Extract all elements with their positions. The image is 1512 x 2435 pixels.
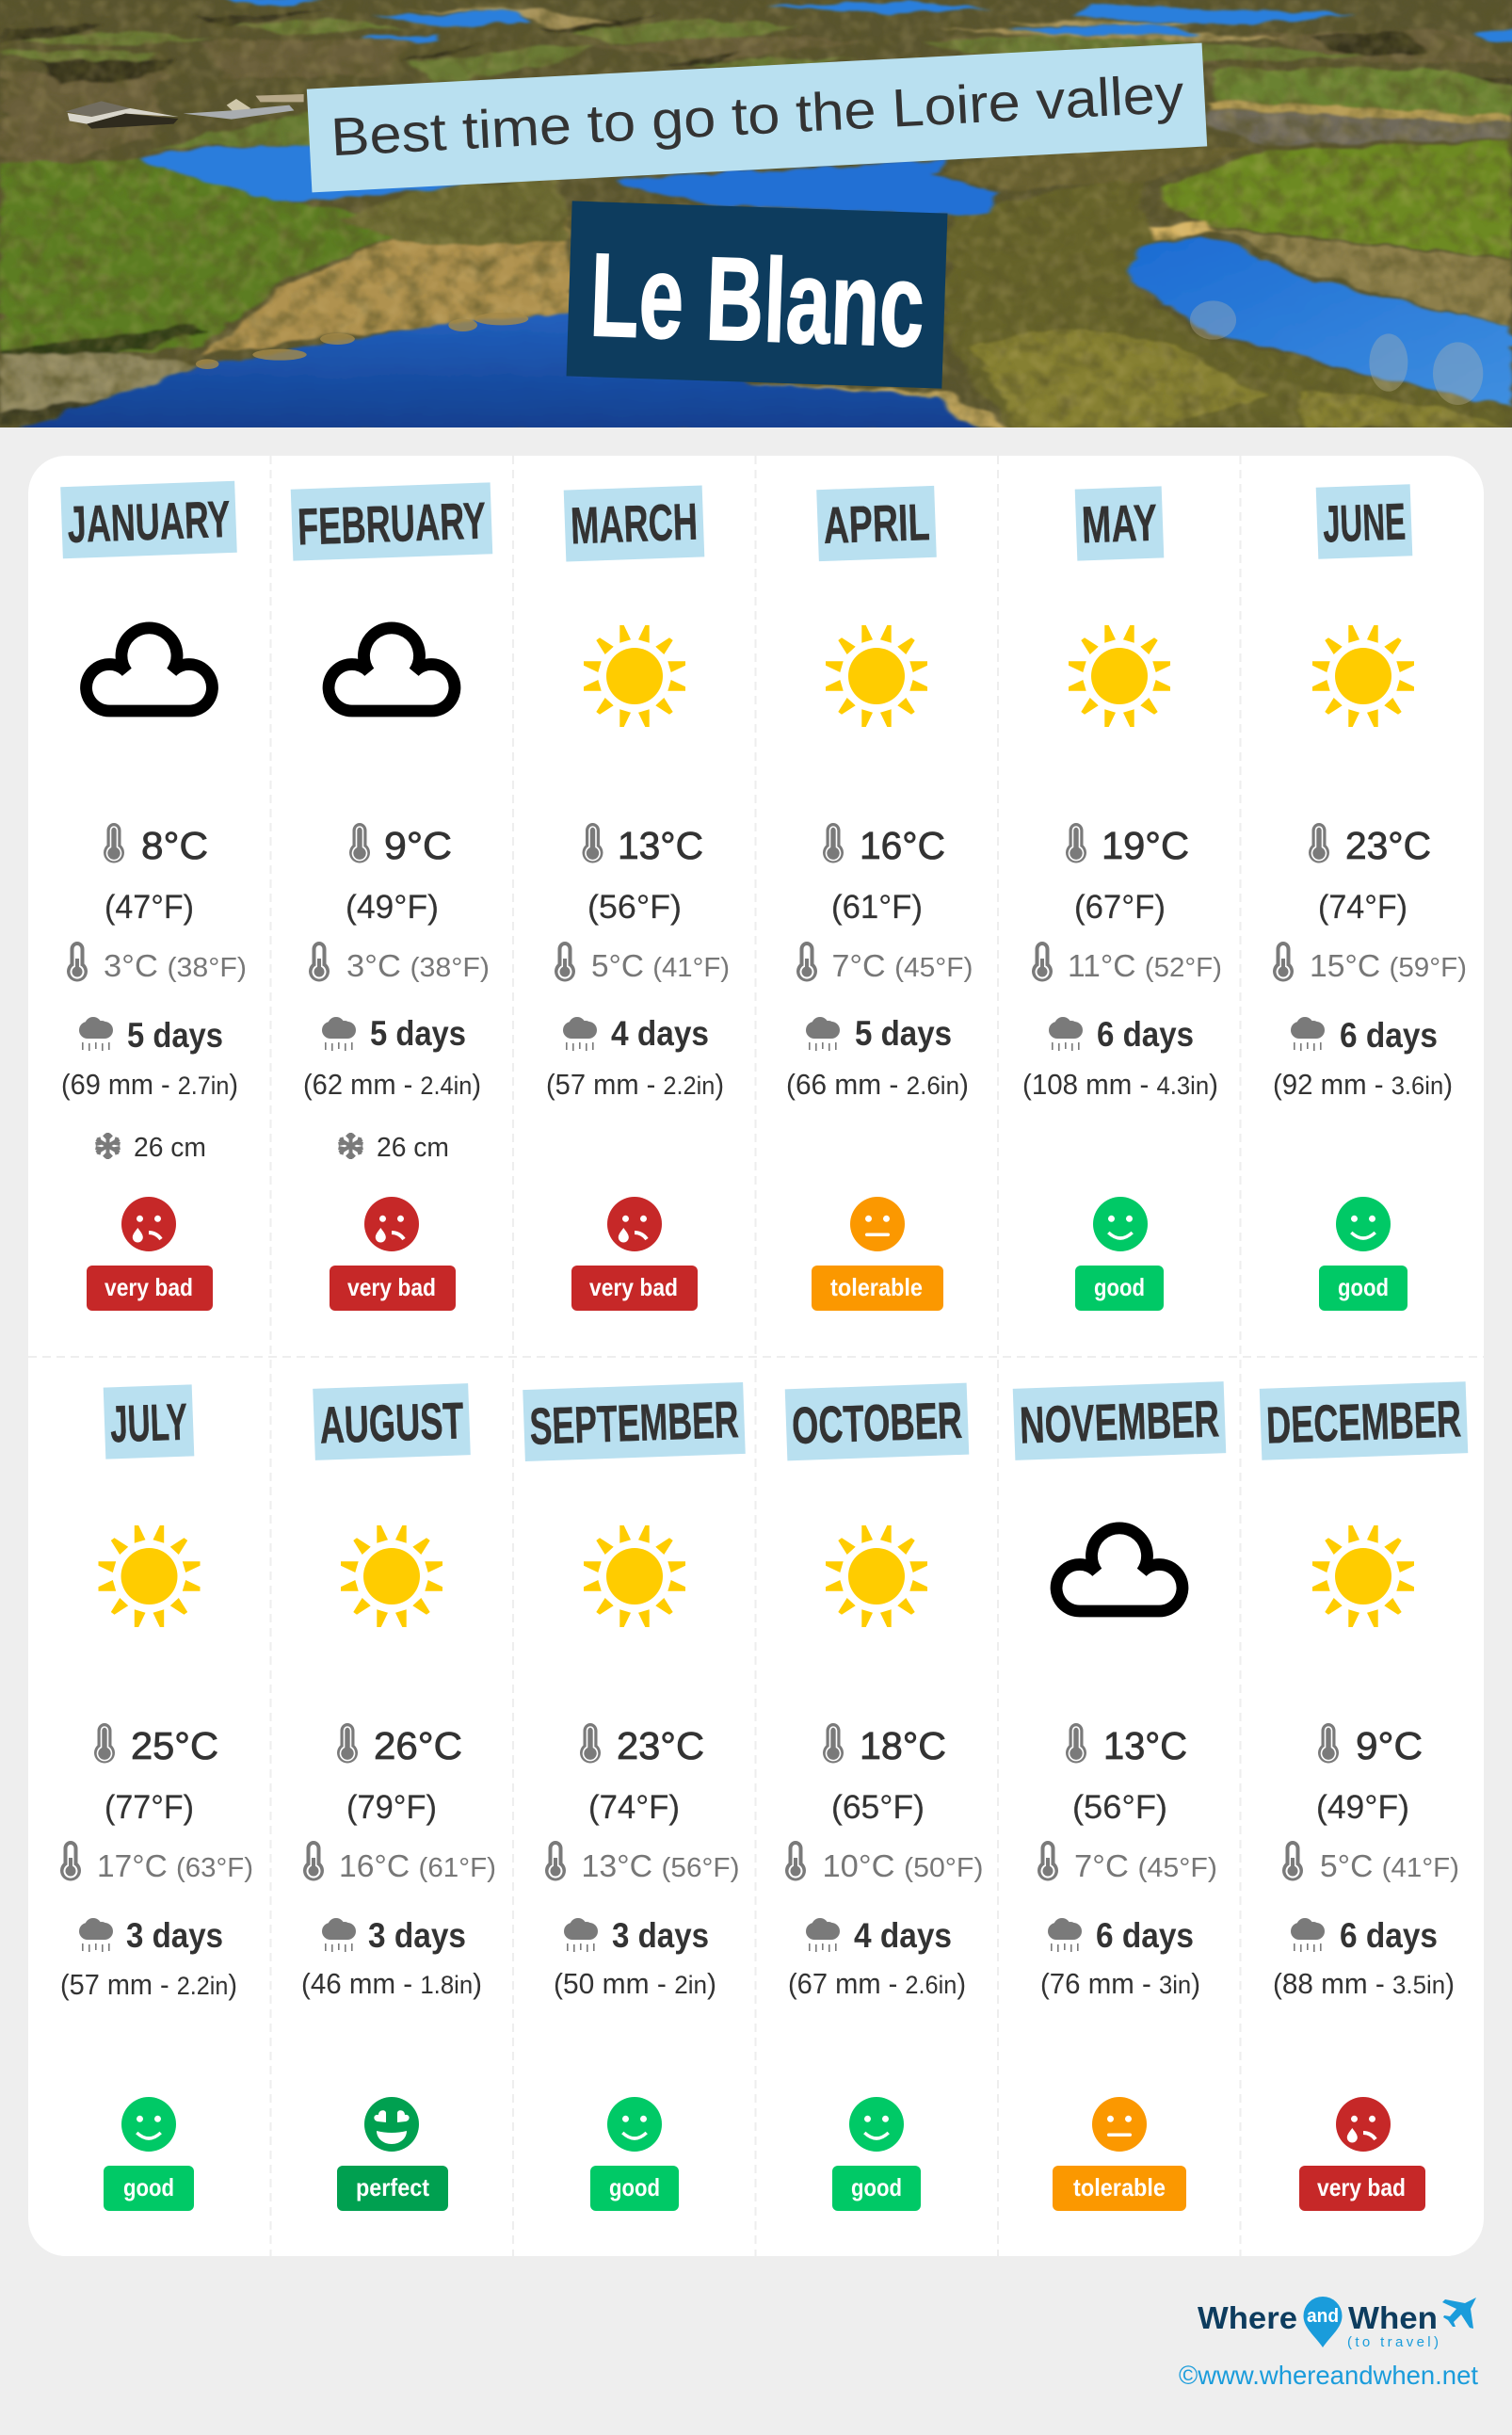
rating badge: good [104,2166,194,2211]
rating badge: good [1075,1266,1164,1311]
rainy days: 5 days [370,1014,466,1053]
rating badge: very bad: very bad [1317,2173,1406,2201]
rating face: very bad [1336,2097,1391,2152]
rainy days: 5 days [127,1016,223,1055]
logo: Where and When [1198,2297,1476,2350]
precipitation: (57 mm - 2.2in) [60,1968,237,2001]
rainy days [1291,1016,1438,1055]
month heading: February [291,482,492,561]
month heading: July: JULY [109,1393,188,1453]
rating badge: good: good [123,2173,174,2201]
logo: Where and When: Where [1198,2300,1297,2335]
high temperature: 9°C [1356,1724,1423,1767]
snowfall [96,1133,206,1163]
month heading: November: NOVEMBER [1019,1389,1220,1455]
rating badge: tolerable [812,1266,943,1311]
column: March [546,485,730,1311]
high temperature [349,823,452,867]
high temperature in Fahrenheit: (79°F) [346,1789,437,1826]
high temperature: 16°C [860,824,945,867]
icon: sun [98,1525,200,1627]
rainy days [1291,1916,1438,1955]
column: January [60,481,247,1311]
column: June [1273,484,1467,1311]
column: October [785,1383,983,2211]
rating face: good [607,2097,662,2152]
high temperature [823,823,945,867]
snowfall: 26 cm [377,1133,449,1163]
column: September [523,1382,746,2211]
rating badge: good [832,2166,921,2211]
precipitation: (108 mm - 4.3in) [1022,1068,1218,1101]
high temperature [580,1723,704,1767]
rainy days [322,1014,466,1053]
rating badge: very bad [87,1266,213,1311]
high temperature: 13°C [618,824,703,867]
column: February [291,482,492,1311]
title banner: Best time to go to the Loire valley [330,64,1185,168]
high temperature in Fahrenheit: (49°F) [1316,1789,1409,1826]
high temperature in Fahrenheit: (67°F) [1074,889,1166,926]
precipitation: (92 mm - 3.6in) [1273,1068,1453,1101]
low temperature: 7°C (45°F) [832,948,973,983]
rating badge: good: good [851,2173,902,2201]
precipitation: (62 mm - 2.4in) [303,1068,481,1101]
high temperature [1318,1723,1423,1767]
rainy days [79,1916,223,1955]
month heading: November [1013,1381,1226,1460]
rainy days: 5 days [855,1014,952,1053]
high temperature: 9°C [384,824,452,867]
rainy days [563,1014,709,1053]
high temperature: 23°C [1345,824,1431,867]
column: November [1013,1381,1226,2211]
low temperature [1037,1841,1217,1883]
rating face: very bad [121,1197,176,1251]
rating face: good [1093,1197,1148,1251]
high temperature in Fahrenheit: (49°F) [346,889,439,926]
icon: cloud [87,628,212,711]
month heading: September [523,1382,746,1461]
high temperature: 23°C [617,1724,704,1767]
low temperature [1282,1841,1459,1883]
precipitation: (46 mm - 1.8in) [301,1967,482,2000]
rating badge: good: good [609,2173,660,2201]
low temperature: 5°C (41°F) [1320,1848,1459,1883]
low temperature [309,942,490,983]
high temperature: 25°C [131,1724,218,1767]
high temperature [1309,823,1431,867]
icon: sun [1312,625,1414,727]
icon: airplane [1442,2298,1476,2329]
precipitation: (76 mm - 3in) [1040,1967,1200,2000]
logo: Where and When: When [1348,2300,1438,2335]
logo: Where and When: (to travel) [1347,2334,1439,2350]
month heading: April [816,486,937,561]
rainy days: 4 days [611,1014,709,1053]
rainy days: 6 days [1096,1916,1194,1955]
rainy days [806,1014,952,1053]
rating face: tolerable [850,1197,905,1251]
month heading: April: APRIL [822,492,931,555]
rating badge: good: good [1094,1273,1145,1301]
precipitation: (67 mm - 2.6in) [788,1967,966,2000]
column: May [1022,486,1222,1311]
rating face: tolerable [1092,2097,1147,2152]
icon: cloud [1056,1528,1182,1611]
rating badge: good [590,2166,679,2211]
rating badge: tolerable: tolerable [1073,2173,1166,2201]
icon: cloud [329,628,455,711]
rainy days [1049,1015,1194,1054]
rating badge: good: good [1338,1273,1389,1301]
rating badge: perfect [337,2166,448,2211]
high temperature: 26°C [374,1724,462,1767]
high temperature [823,1723,946,1767]
precipitation: (57 mm - 2.2in) [546,1068,724,1101]
high temperature [337,1723,462,1767]
copyright website link: ©www.whereandwhen.net [1179,2361,1478,2390]
month heading: October: OCTOBER [791,1391,963,1455]
low temperature: 15°C (59°F) [1310,948,1467,983]
rainy days [322,1916,466,1955]
rating face: good [1336,1197,1391,1251]
high temperature in Fahrenheit: (65°F) [831,1789,925,1826]
low temperature [555,942,730,983]
icon: sun [584,1525,685,1627]
precipitation: (88 mm - 3.5in) [1273,1967,1455,2000]
low temperature: 16°C (61°F) [339,1848,496,1883]
rating badge: good [1319,1266,1407,1311]
low temperature: 11°C (52°F) [1068,948,1222,983]
rainy days [564,1916,709,1955]
low temperature [1273,942,1467,983]
rating badge: very bad: very bad [105,1273,193,1301]
low temperature [60,1841,253,1883]
month heading: August [313,1383,471,1460]
city name banner [567,201,947,389]
precipitation: (69 mm - 2.7in) [61,1068,238,1101]
rating face: very bad [607,1197,662,1251]
precipitation: (50 mm - 2in) [554,1967,716,2000]
month heading: September: SEPTEMBER [529,1390,740,1456]
high temperature: 19°C [1102,824,1189,867]
low temperature: 10°C (50°F) [823,1848,983,1883]
low temperature [1032,942,1222,983]
rating badge: very bad [330,1266,456,1311]
low temperature [796,942,973,983]
high temperature in Fahrenheit: (74°F) [1318,889,1407,926]
low temperature: 3°C (38°F) [104,948,247,983]
rainy days: 6 days [1340,1016,1438,1055]
icon: sun [826,625,927,727]
rating face: good [849,2097,904,2152]
rainy days: 3 days [612,1916,709,1955]
month heading: January [60,481,237,558]
rating face: very bad [364,1197,419,1251]
high temperature in Fahrenheit: (77°F) [105,1789,194,1826]
icon: sun [826,1525,927,1627]
rating badge: tolerable: tolerable [830,1273,923,1301]
high temperature [104,823,208,867]
high temperature in Fahrenheit: (47°F) [105,889,194,926]
low temperature [785,1841,983,1883]
high temperature [582,823,703,867]
rainy days [806,1916,952,1955]
icon: sun [584,625,685,727]
rainy days: 4 days [854,1916,952,1955]
icon: map pin [1303,2297,1343,2347]
rainy days: 6 days [1340,1916,1438,1955]
month heading: October [785,1383,969,1460]
rainy days [1048,1916,1194,1955]
low temperature: 7°C (45°F) [1074,1848,1217,1883]
icon: map pin: and [1307,2306,1339,2327]
rating badge: very bad: very bad [589,1273,678,1301]
month heading: March: MARCH [570,492,699,555]
month heading: May: MAY [1081,493,1158,554]
icon: sun [1312,1525,1414,1627]
column: April [786,486,973,1311]
rainy days: 3 days [368,1916,466,1955]
column: August [301,1383,496,2211]
rating badge: very bad [1299,2166,1425,2211]
month heading: May [1075,486,1164,561]
high temperature: 13°C [1103,1724,1187,1767]
rating badge: very bad [571,1266,698,1311]
month heading: June [1316,484,1412,559]
precipitation: (66 mm - 2.6in) [786,1068,969,1101]
icon: sun [1069,625,1170,727]
snowfall [339,1133,449,1163]
rainy days [79,1016,223,1055]
low temperature [545,1841,740,1883]
high temperature in Fahrenheit: (56°F) [1072,1789,1167,1826]
low temperature [67,942,247,983]
high temperature: 18°C [860,1724,946,1767]
column: July [60,1384,253,2211]
high temperature [1066,1723,1187,1767]
rating badge: tolerable [1053,2166,1186,2211]
low temperature: 5°C (41°F) [591,948,730,983]
month heading: June: JUNE [1322,492,1407,554]
title banner [307,43,1207,192]
rating badge: very bad: very bad [347,1273,436,1301]
low temperature: 17°C (63°F) [97,1848,253,1883]
low temperature: 3°C (38°F) [346,948,490,983]
rating badge: perfect: perfect [356,2173,429,2201]
month heading: January: JANUARY [67,490,232,554]
column: December [1260,1381,1468,2211]
high temperature in Fahrenheit: (74°F) [588,1789,680,1826]
header photo: Loire valley lakes [0,0,1512,430]
month heading: March [564,485,704,562]
month heading: July [104,1384,194,1459]
city name banner: Le Blanc [588,228,926,372]
rainy days: 3 days [126,1916,223,1955]
low temperature: 13°C (56°F) [582,1848,740,1883]
rating face: good [121,2097,176,2152]
rating face: perfect [364,2097,419,2152]
month heading: February: FEBRUARY [297,492,487,556]
month heading: August: AUGUST [318,1391,465,1455]
high temperature [1066,823,1189,867]
snowfall: 26 cm [134,1133,206,1163]
high temperature: 8°C [141,824,208,867]
high temperature [94,1723,218,1767]
high temperature in Fahrenheit: (56°F) [587,889,682,926]
icon: sun [341,1525,442,1627]
rainy days: 6 days [1097,1015,1194,1054]
panel: monthly climate card [28,456,1484,2256]
low temperature [303,1841,496,1883]
high temperature in Fahrenheit: (61°F) [831,889,923,926]
